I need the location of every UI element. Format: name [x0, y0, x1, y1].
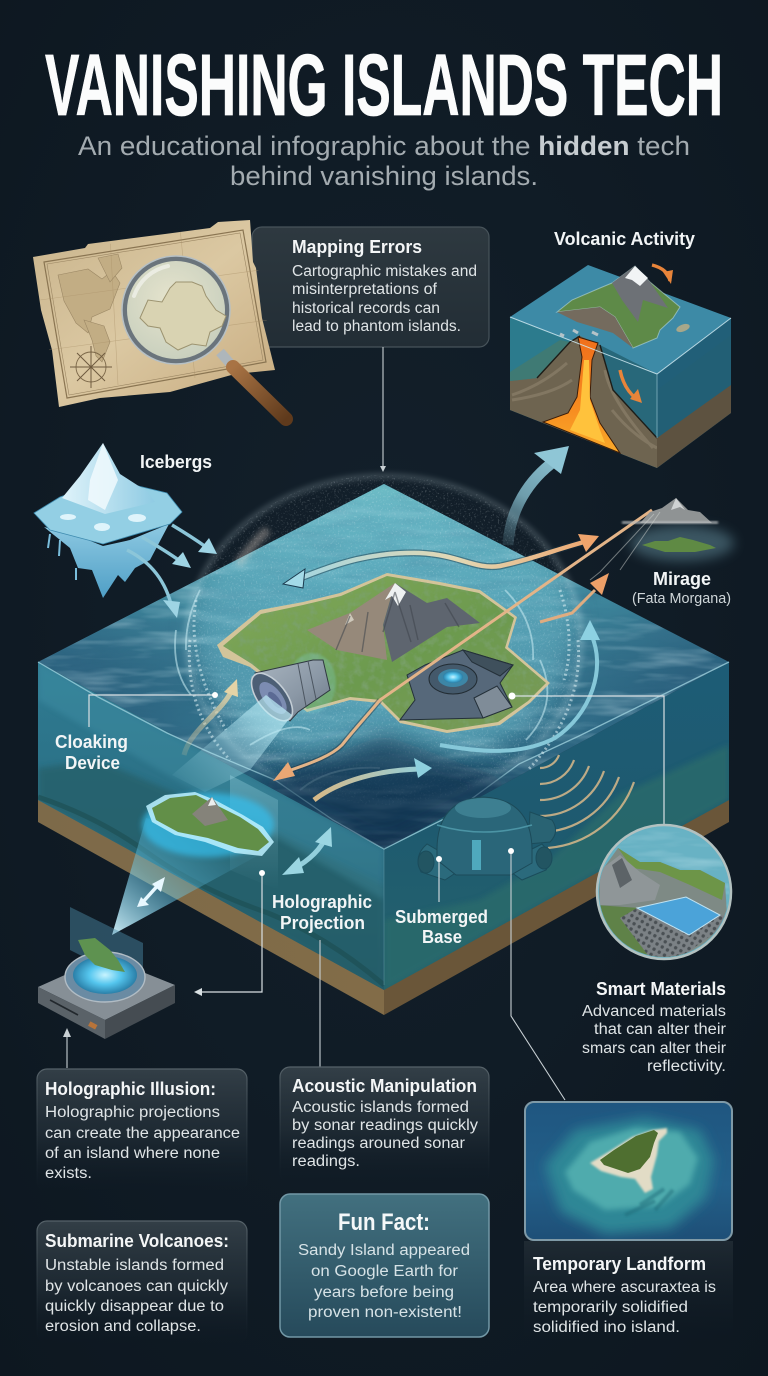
panel: submarine volcanoes [37, 1221, 247, 1343]
arrow: cloaking tan arrow [184, 679, 238, 755]
panel: submarine volcanoes: by volcanoes can quickly [45, 1278, 228, 1295]
sub: left water face [38, 662, 384, 996]
illustration: island tech base [400, 650, 513, 720]
panel: holographic illusion: Holographic Illusion: [45, 1079, 216, 1099]
illustration: hologram projector [38, 907, 175, 1039]
arrow: projector beam double arrow [137, 877, 165, 907]
panel: mapping errors: historical records can [292, 300, 440, 317]
leader: cloaking device [89, 692, 218, 727]
panel: acoustic manipulation: readings arouned sonar [292, 1135, 465, 1152]
label: holographic projection: Holographic [272, 892, 372, 912]
illustration: cloaking device cylinder [244, 653, 336, 728]
subtitle [78, 131, 690, 191]
sub: eruption arrows [620, 265, 673, 403]
arrow: long orange double arrow [273, 510, 652, 781]
label: cloaking device: Device [65, 753, 120, 773]
sub: seabed soil [38, 795, 729, 1015]
arrow: lower tan to blue arrow [314, 758, 432, 800]
panel: holographic illusion: of an island where none [45, 1145, 220, 1162]
panel: fun fact: Sandy Island appeared [298, 1242, 470, 1259]
leader: submerged base [436, 856, 442, 902]
panel: temporary landform: Temporary Landform [533, 1254, 706, 1274]
label: holographic projection [272, 892, 372, 933]
text: smart materials: that can alter their [594, 1021, 726, 1038]
text: smart materials: smars can alter their [582, 1040, 726, 1057]
illustration: holographic island [142, 792, 274, 857]
panel: submarine volcanoes: Unstable islands formed [45, 1257, 224, 1274]
panel: fun fact: on Google Earth for [311, 1263, 458, 1280]
label: mirage [632, 569, 731, 607]
panel: fun fact: proven non-existent! [308, 1304, 462, 1321]
panel: fun fact [280, 1194, 489, 1337]
illustration: mirage [590, 498, 734, 580]
panel: acoustic manipulation [280, 1067, 489, 1183]
panel: holographic illusion [37, 1069, 247, 1191]
beam: holographic light beam [112, 818, 268, 935]
illustration: submerged base [418, 797, 556, 880]
panel: acoustic manipulation: Acoustic islands formed [292, 1099, 469, 1116]
label: holographic projection: Projection [280, 913, 365, 933]
sub: right face [510, 317, 731, 468]
label: mirage: Mirage [653, 569, 711, 589]
panel: submarine volcanoes: Submarine Volcanoes: [45, 1231, 229, 1251]
panel: temporary landform: temporarily solidified [533, 1299, 688, 1316]
text: smart materials: Advanced materials [582, 1003, 726, 1020]
sub: right water face [384, 662, 729, 990]
panel: temporary landform: solidified ino island. [533, 1319, 680, 1336]
illustration: iceberg [34, 443, 182, 598]
label: volcanic activity: Volcanic Activity [554, 229, 695, 249]
icon: smart materials inset [595, 825, 735, 960]
panel: temporary landform: Area where ascuraxtea is [533, 1279, 716, 1296]
text: smart materials: reflectivity. [647, 1058, 726, 1075]
sub: left face [510, 317, 657, 468]
sub: sea top [510, 265, 731, 374]
panel: fun fact: years before being [314, 1284, 454, 1301]
leader: holographic projection [194, 870, 265, 996]
panel: mapping errors: Cartographic mistakes and [292, 263, 477, 280]
arrow: wavy long arrow [283, 534, 599, 588]
arrow: projector to illusion panel [63, 1028, 71, 1068]
sub: ocean surface [38, 484, 730, 850]
leader: smart materials [508, 692, 664, 826]
panel: temporary landform [524, 1102, 733, 1341]
icon: antique map with magnifying glass [33, 220, 286, 419]
label: mirage: (Fata Morgana) [632, 591, 731, 607]
arrow: big arrow toward volcano [508, 446, 569, 545]
illustration: protective dome [175, 475, 582, 849]
panel: acoustic manipulation: by sonar readings quickly [292, 1117, 478, 1134]
panel: mapping errors [252, 227, 489, 347]
beam: cloaking water stream [172, 695, 292, 792]
sub: mountain [307, 583, 480, 662]
illustration: isometric ocean block [38, 484, 730, 1015]
beam: water sheet [230, 775, 278, 890]
panel: submarine volcanoes: erosion and collapse. [45, 1318, 201, 1335]
leader: projection to acoustic [319, 940, 321, 1067]
panel: holographic illusion: exists. [45, 1165, 92, 1182]
label: submerged base [395, 907, 488, 947]
arrow: curved blue arrow right [440, 620, 600, 751]
sub: magnifier handle [220, 352, 286, 419]
panel: mapping errors: misinterpretations of [292, 281, 438, 298]
label: submerged base: Base [422, 927, 462, 947]
panel: submarine volcanoes: quickly disappear due to [45, 1298, 224, 1315]
arrow: mapping errors leader [380, 347, 386, 472]
panel: acoustic manipulation: Acoustic Manipulation [292, 1076, 477, 1096]
panel: holographic illusion: can create the appearance [45, 1125, 240, 1142]
panel: acoustic manipulation: readings. [292, 1153, 360, 1170]
text: smart materials [582, 979, 726, 1075]
sub: satellite island image [525, 1102, 732, 1240]
leader: temporary landform [508, 848, 565, 1100]
illustration: volcano cross-section cube [510, 265, 731, 468]
subtitle: behind vanishing islands. [230, 161, 538, 191]
sub: magnifier lens [122, 256, 230, 364]
panel: fun fact: Fun Fact: [338, 1209, 430, 1236]
arrow: double arrow hologram [282, 827, 332, 875]
sub: volcanic island [557, 266, 691, 348]
panel: mapping errors: Mapping Errors [292, 237, 422, 257]
illustration: central island [217, 570, 553, 735]
label: icebergs: Icebergs [140, 452, 212, 472]
text: smart materials: Smart Materials [596, 979, 726, 999]
label: submerged base: Submerged [395, 907, 488, 927]
panel: holographic illusion: Holographic projections [45, 1104, 220, 1121]
label: cloaking device [55, 732, 128, 773]
arrow: iceberg currents [127, 525, 217, 618]
arcs: sonar waves [540, 755, 634, 848]
panel: mapping errors: lead to phantom islands. [292, 318, 461, 335]
label: cloaking device: Cloaking [55, 732, 128, 752]
subtitle: An educational infographic about the hidden tech [78, 131, 690, 161]
